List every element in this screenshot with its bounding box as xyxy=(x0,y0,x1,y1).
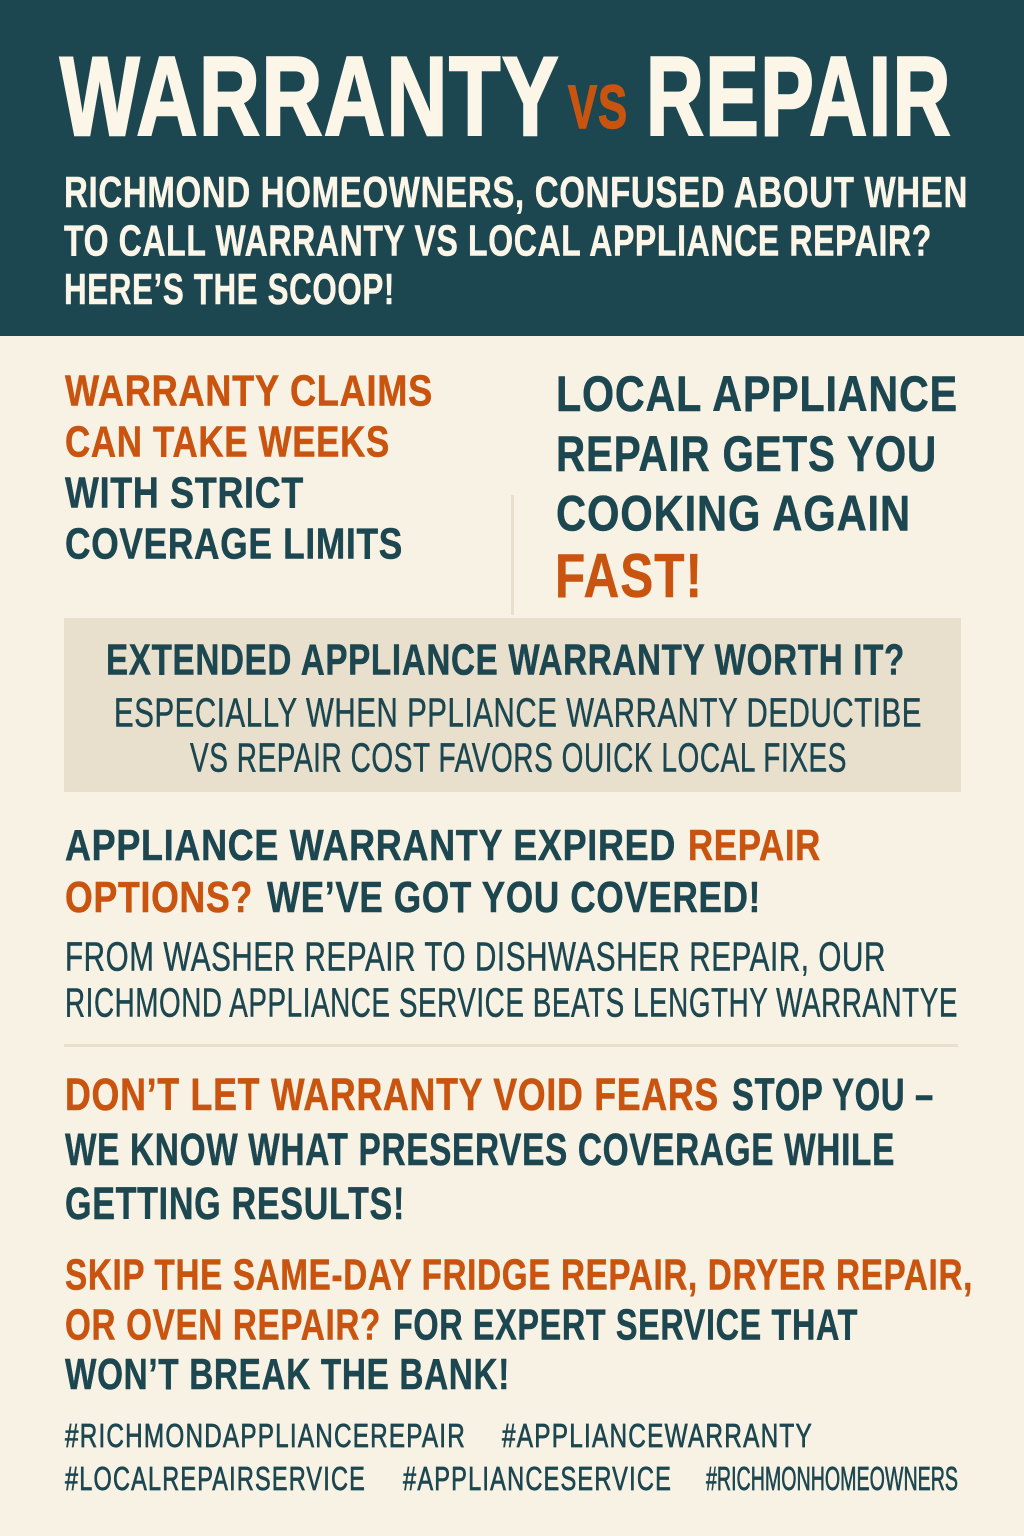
panel: local appliance repair xyxy=(555,366,958,611)
hashtags: #APPLIANCEWARRANTY xyxy=(502,1417,813,1454)
hashtags: #APPLIANCESERVICE xyxy=(403,1460,672,1497)
panel: local appliance repair: COOKING AGAIN xyxy=(556,486,911,542)
title: WARRANTY xyxy=(60,34,560,159)
panel: warranty claims: WITH STRICT xyxy=(65,468,304,518)
panel: warranty expired xyxy=(65,821,958,1026)
panel: warranty void fears: STOP YOU – xyxy=(732,1069,934,1120)
subtitle: HERE’S THE SCOOP! xyxy=(64,265,395,314)
panel: expert service: OR OVEN REPAIR? xyxy=(65,1300,381,1350)
panel: extended warranty callout xyxy=(64,618,961,792)
panel: warranty void fears xyxy=(65,1069,934,1229)
panel: header xyxy=(0,0,1024,336)
panel: warranty void fears: GETTING RESULTS! xyxy=(65,1178,405,1229)
subtitle xyxy=(64,168,968,314)
hashtags: #RICHMONDAPPLIANCEREPAIR xyxy=(65,1417,466,1454)
panel: warranty expired: OPTIONS? xyxy=(65,873,253,922)
panel: warranty expired: WE’VE GOT YOU COVERED! xyxy=(267,873,761,922)
panel: expert service: FOR EXPERT SERVICE THAT xyxy=(393,1300,858,1350)
panel: warranty claims: COVERAGE LIMITS xyxy=(65,520,403,568)
hashtags xyxy=(65,1417,958,1497)
panel: warranty expired: APPLIANCE WARRANTY EXPIRED xyxy=(65,821,676,870)
panel: warranty claims xyxy=(65,366,433,568)
panel: local appliance repair: FAST! xyxy=(555,542,703,611)
panel: warranty claims: CAN TAKE WEEKS xyxy=(65,418,390,466)
panel: warranty expired: REPAIR xyxy=(688,821,821,870)
title: VS xyxy=(568,73,628,141)
panel: local appliance repair: REPAIR GETS YOU xyxy=(556,426,937,482)
panel: expert service: WON’T BREAK THE BANK! xyxy=(65,1350,510,1399)
panel: expert service xyxy=(65,1250,973,1399)
panel: warranty claims: WARRANTY CLAIMS xyxy=(65,366,433,416)
panel: warranty void fears: DON’T LET WARRANTY VOID FEARS xyxy=(65,1069,719,1120)
hashtags: #LOCALREPAIRSERVICE xyxy=(65,1460,366,1497)
